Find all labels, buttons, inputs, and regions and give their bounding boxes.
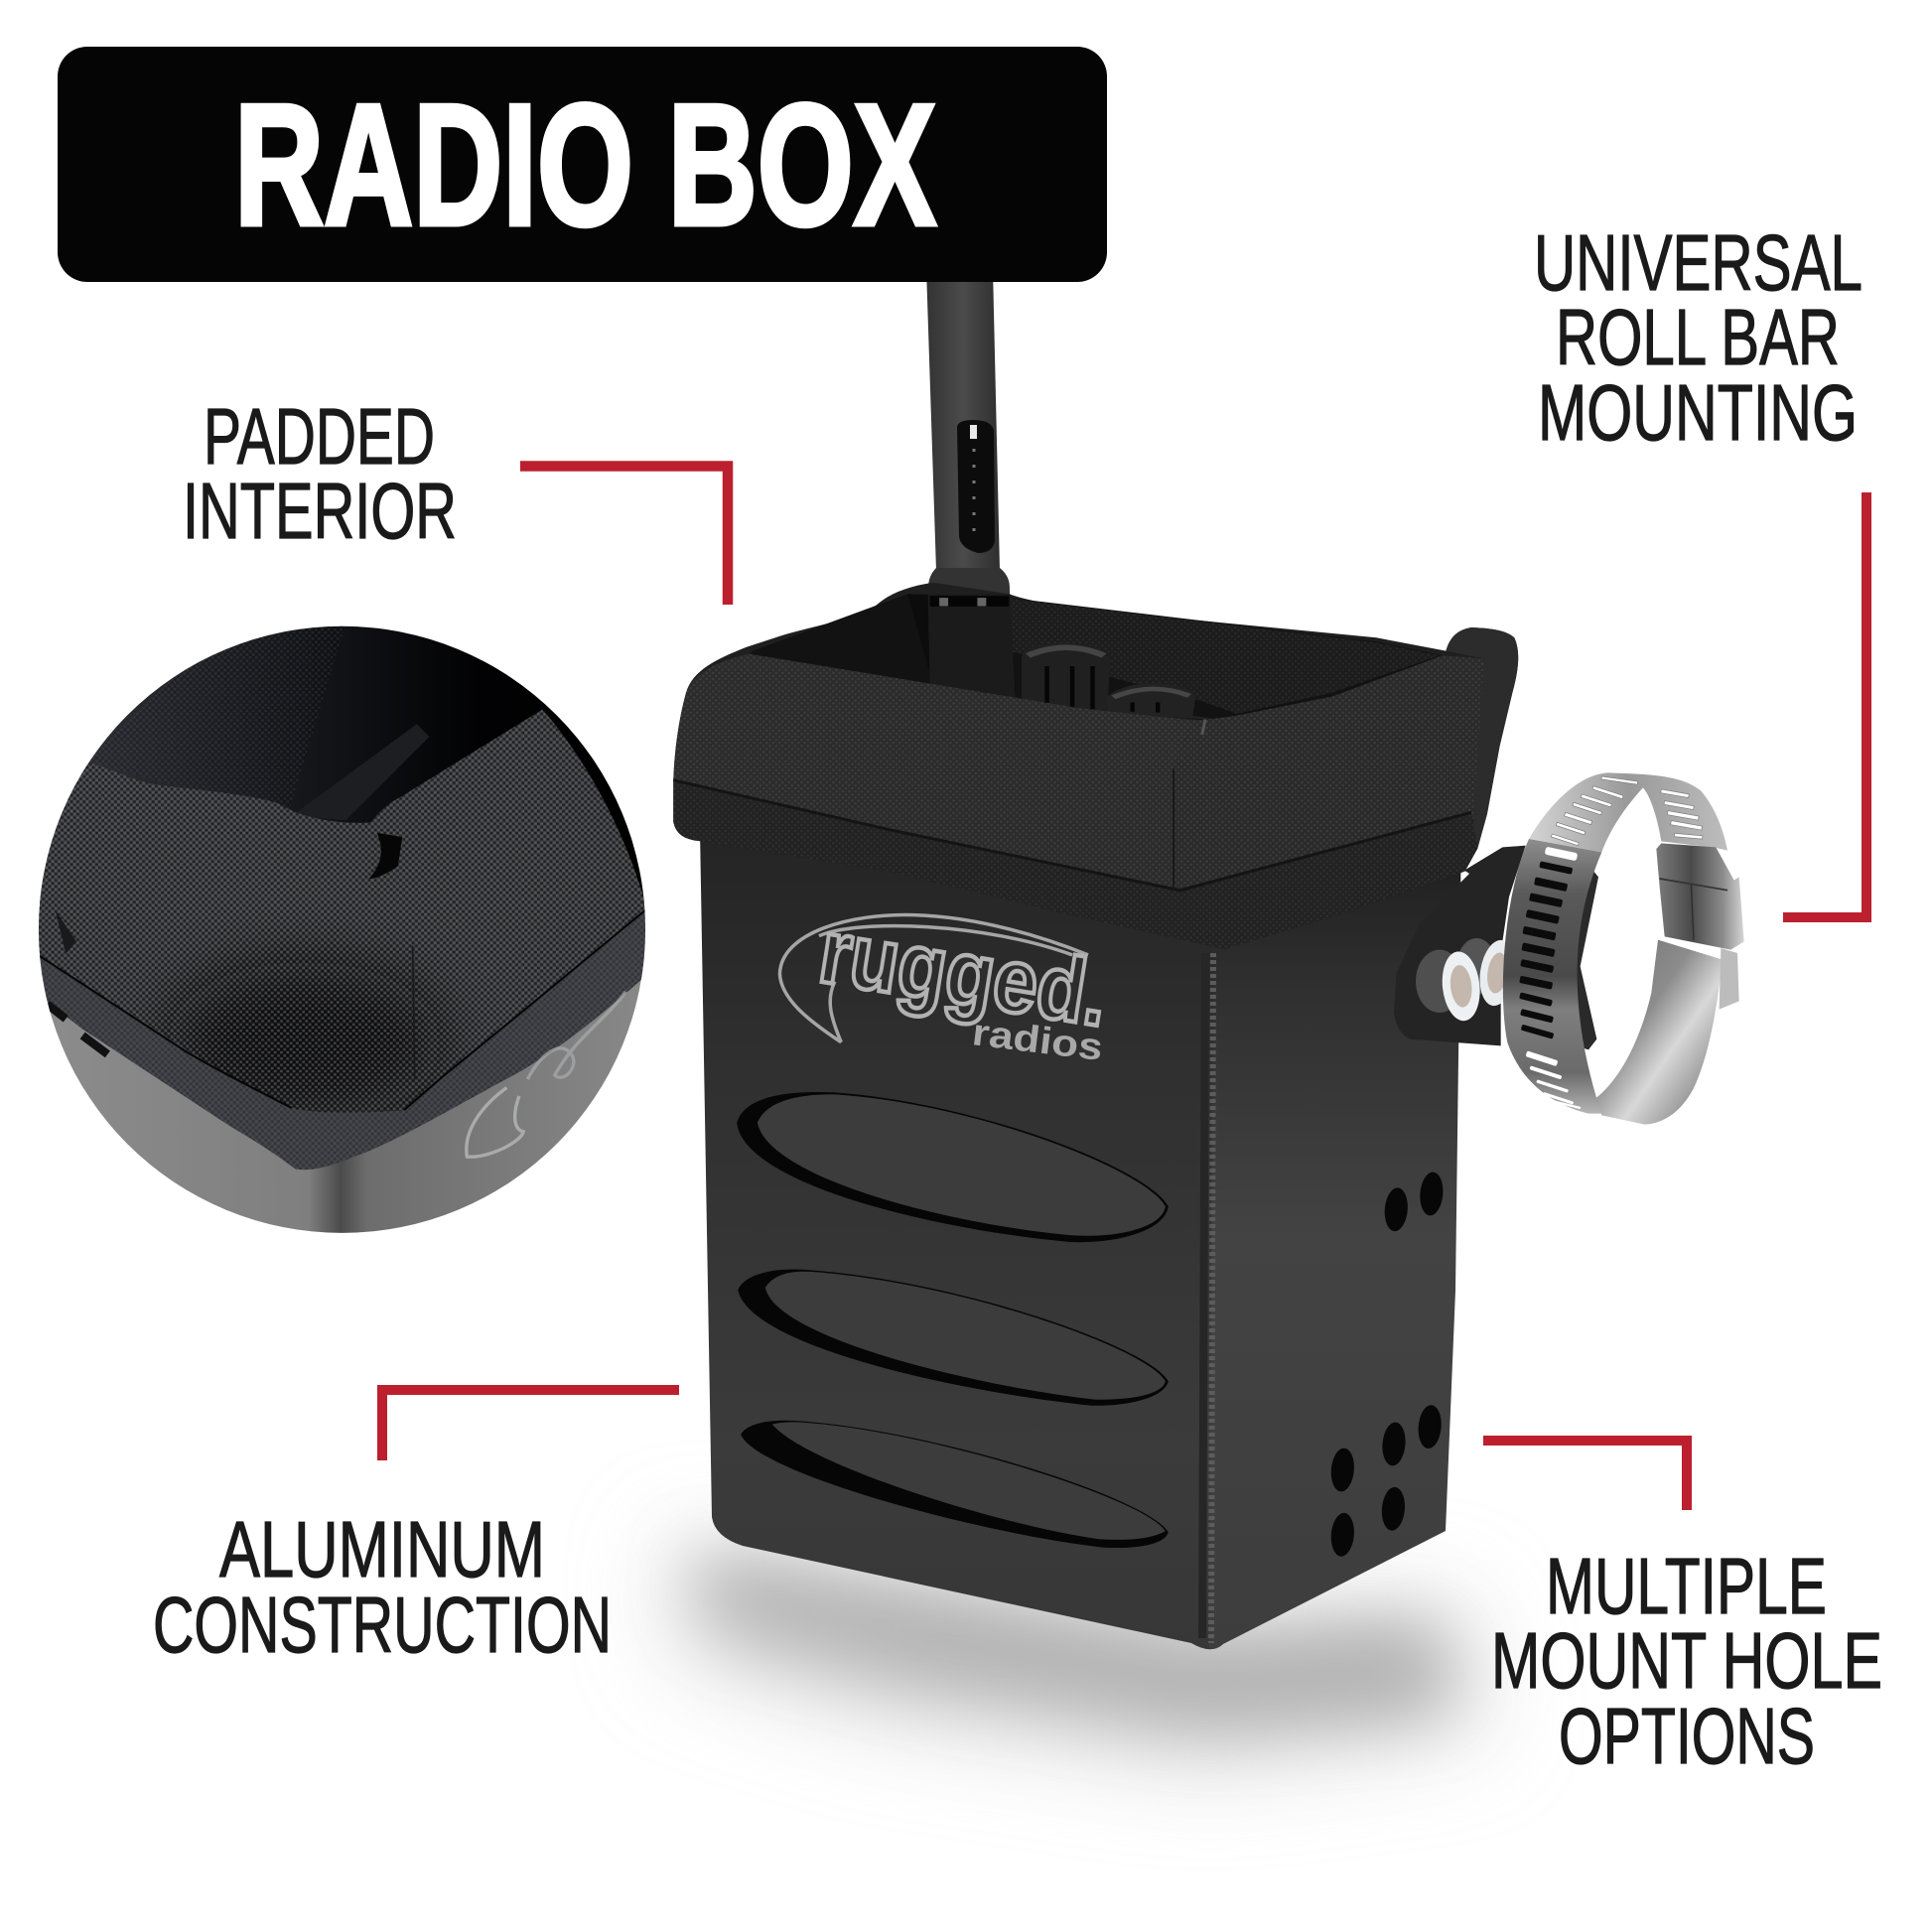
inset binding trim (37, 908, 646, 1170)
cuff opening (750, 594, 1443, 720)
inset padded fabric (37, 710, 646, 1121)
label (153, 1505, 612, 1669)
floor shadow (675, 1549, 1479, 1757)
top of steel band (1529, 772, 1727, 852)
cuff side panel (1173, 627, 1518, 891)
lower steel band (1595, 940, 1723, 1125)
ventilation slots (737, 1092, 1169, 1548)
label: PADDED (204, 392, 435, 481)
label (183, 392, 457, 555)
label (1491, 1542, 1882, 1780)
callout: padded interior (183, 392, 728, 605)
fastening screws (1416, 938, 1519, 1023)
inset metal background (40, 949, 645, 1233)
roll bar clamp (1394, 772, 1744, 1125)
slot 3 (741, 1421, 1169, 1548)
radio stem and knobs (928, 594, 1224, 720)
aluminum box side face (1202, 824, 1461, 1648)
label: CONSTRUCTION (153, 1581, 612, 1669)
inset logo outline (467, 992, 625, 1157)
cuff front panel (673, 654, 1192, 891)
title banner (58, 47, 1107, 282)
detail inset: padded interior close-up (38, 625, 645, 1233)
aluminum box front face (700, 829, 1217, 1649)
antenna (926, 268, 1010, 606)
red leader line (1483, 1441, 1687, 1510)
red leader line (382, 1390, 679, 1460)
worm drive housing (1656, 843, 1744, 1010)
callout: universal roll bar mounting (1534, 218, 1866, 917)
inset dark interior (40, 625, 645, 908)
red leader line (520, 467, 728, 605)
label: MULTIPLE (1546, 1542, 1827, 1630)
logo swoosh (779, 915, 1088, 1042)
label: OPTIONS (1559, 1692, 1815, 1780)
padded cuff (673, 583, 1518, 949)
mount holes (1329, 1172, 1445, 1557)
logo sub-word: radios (970, 1012, 1105, 1069)
callout: aluminum construction (153, 1390, 679, 1669)
red leader line (1783, 492, 1866, 917)
label (1534, 218, 1863, 457)
mounting bracket (1394, 846, 1598, 1049)
rugged radios logo (779, 900, 1115, 1069)
slot 1 (737, 1092, 1169, 1242)
front steel band (1503, 839, 1601, 1114)
slot 2 (738, 1269, 1169, 1406)
product: radio box (673, 268, 1744, 1649)
label: ALUMINUM (219, 1505, 545, 1593)
title text: RADIO BOX (234, 68, 936, 261)
cuff lower band (673, 720, 1477, 949)
logo wordmark: rugged. (813, 900, 1115, 1045)
callout: multiple mount hole options (1483, 1441, 1882, 1780)
label: INTERIOR (183, 467, 457, 555)
